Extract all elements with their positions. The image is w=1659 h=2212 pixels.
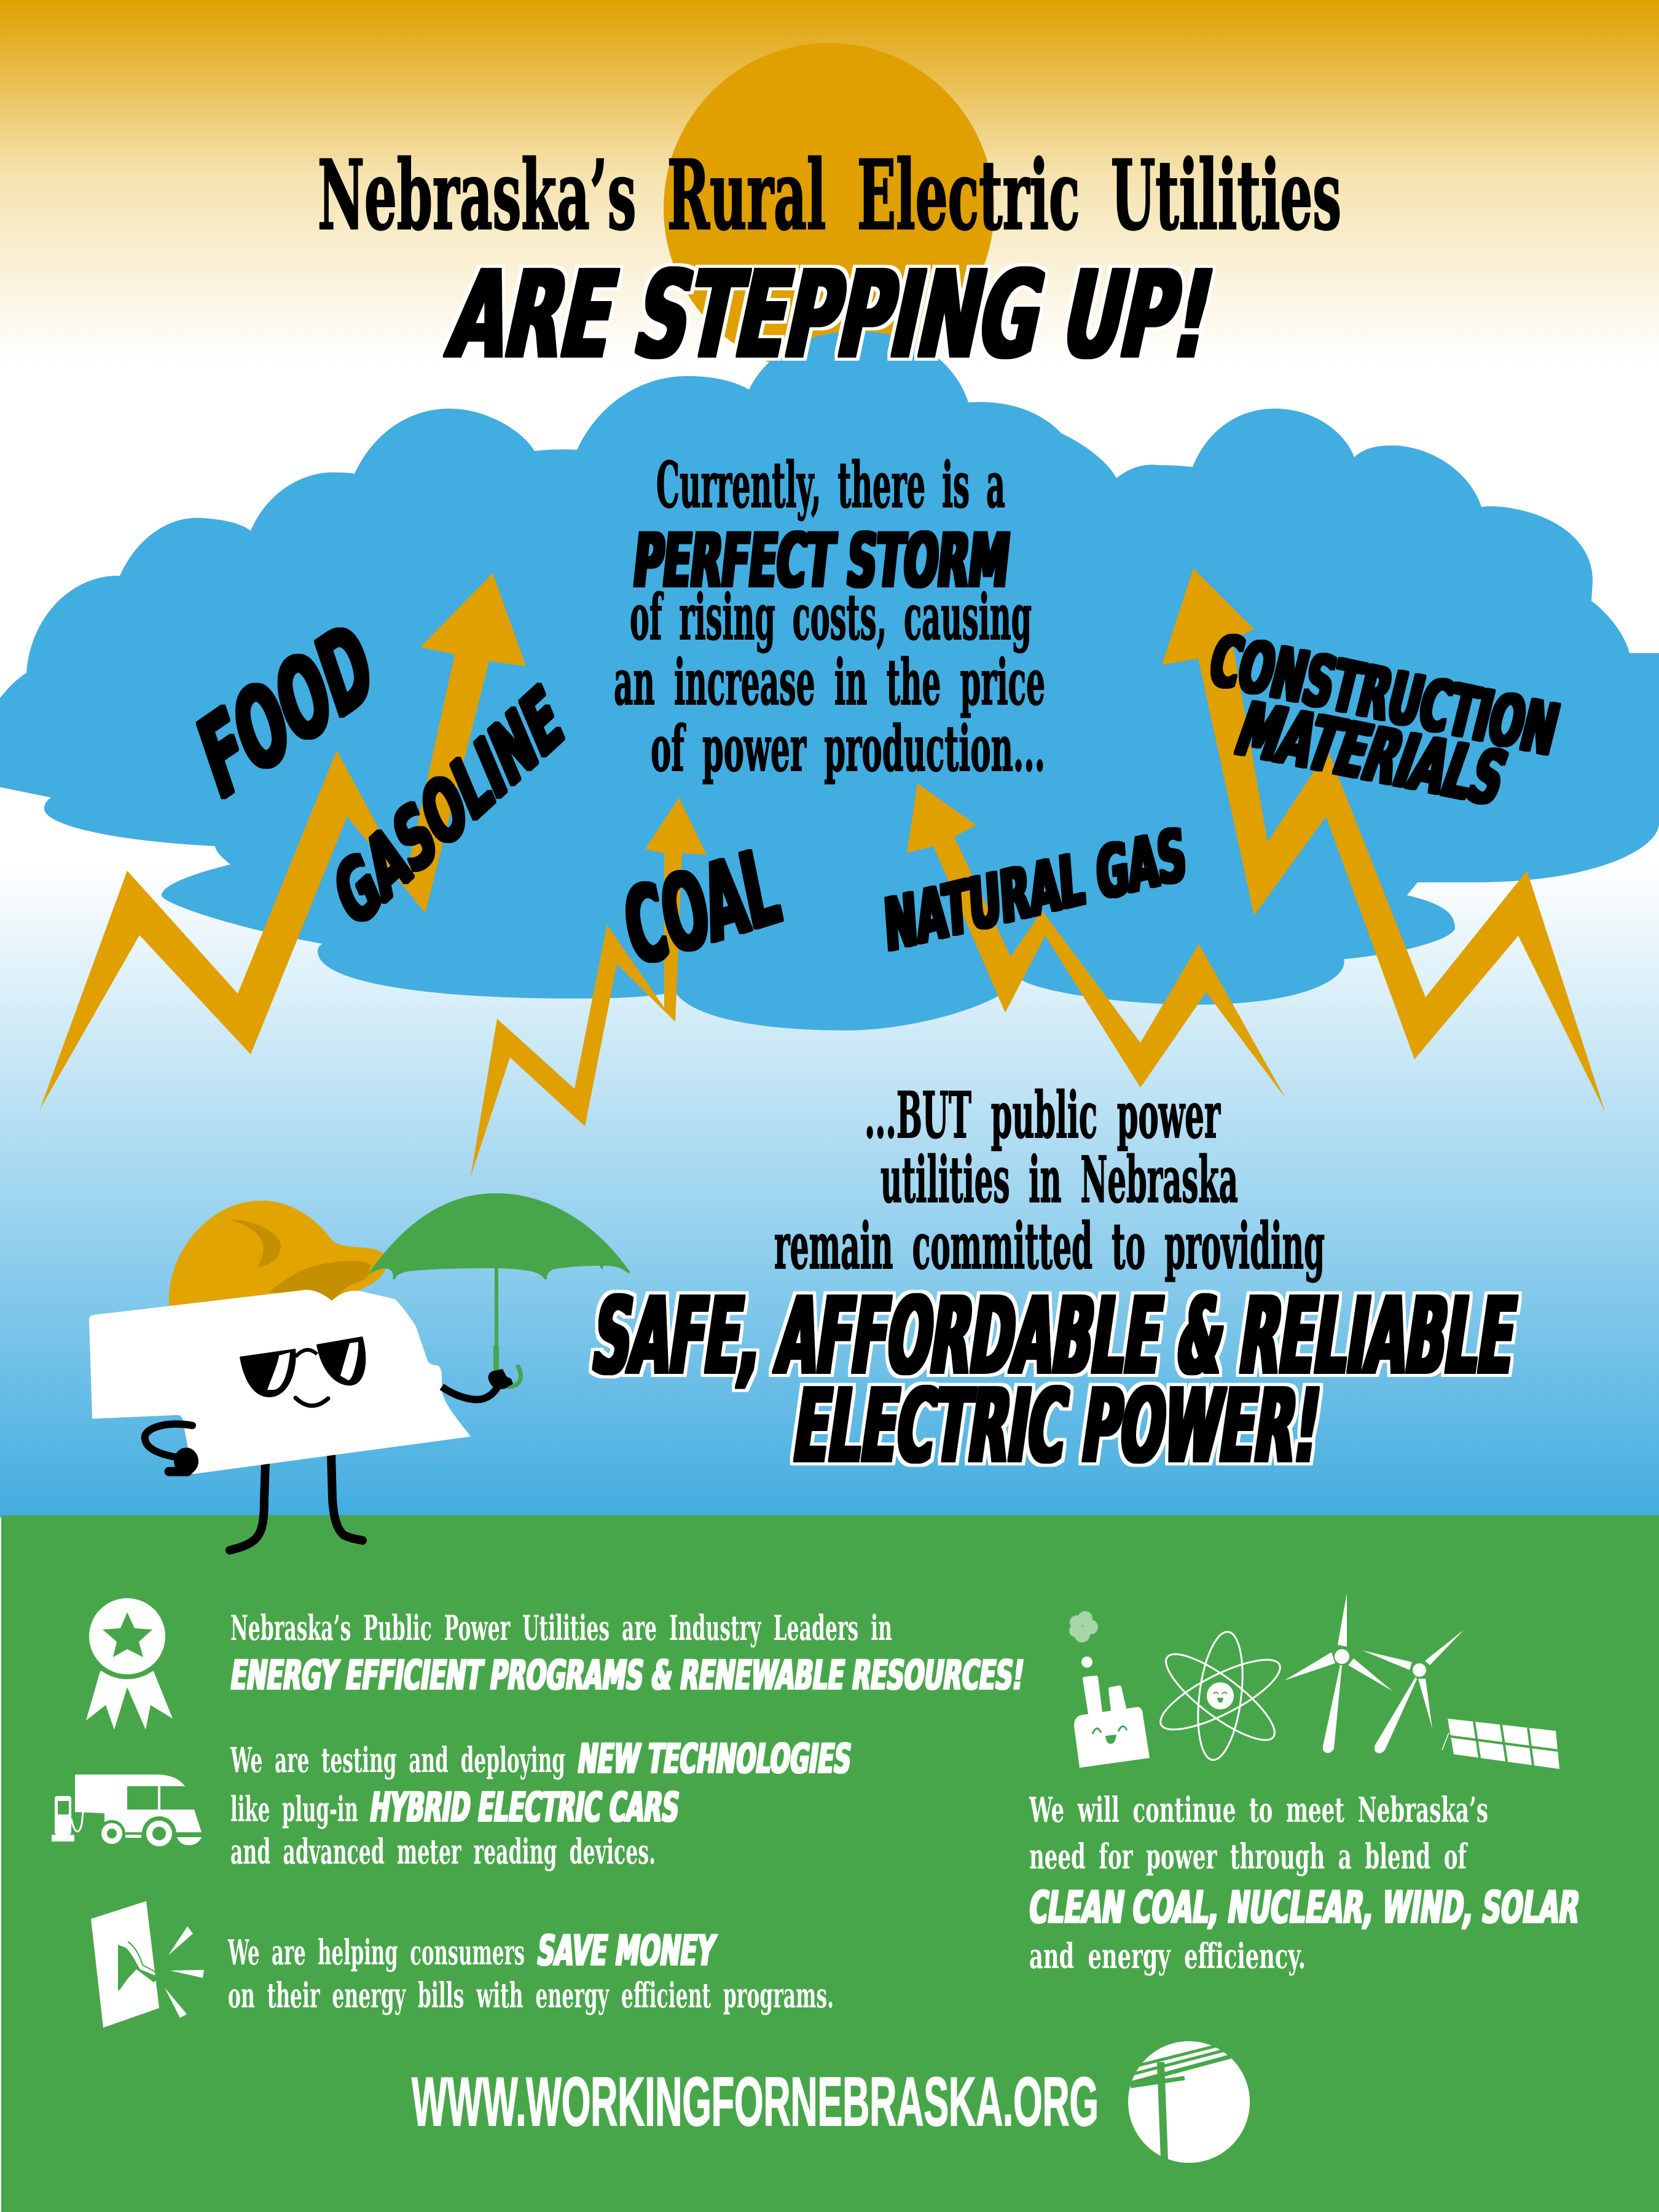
text block: perfect storm: PERFECT STORM [630,518,1014,604]
headline: safe affordable reliable electric power [586,1275,1523,1486]
text: new technologies: NEW TECHNOLOGIES [575,1735,855,1783]
text: of rising costs, causing [630,581,1032,654]
storm cloud [0,331,1659,1030]
text block: perfect storm: Currently, there is a [656,449,1005,522]
mascot legs [230,1453,363,1550]
text: save money [227,1927,834,2016]
text block: perfect storm [614,449,1045,786]
sun [664,43,994,374]
arrow: natural gas [907,783,1285,1098]
sunglasses [240,1336,366,1397]
arrow: food and gasoline [40,573,526,1109]
text: industry leaders: Nebraska’s Public Power Utilities are Industry Leaders in [230,1608,892,1649]
text: save money: on their energy bills with energy efficient programs. [228,1975,834,2016]
text: of power production... [651,712,1045,786]
icon: award ribbon [84,1593,173,1730]
label: food: FOOD [187,596,386,826]
label: gasoline: GASOLINE [324,665,573,949]
text: new technologies: HYBRID ELECTRIC CARS [367,1783,683,1831]
text: new technologies: and advanced meter reading devices. [230,1832,656,1872]
icon: smiling power plant [1069,1611,1150,1768]
logo: power pole in circle [1126,2041,1250,2163]
text block: but public power: utilities in Nebraska [880,1143,1238,1217]
right arm [442,1382,499,1400]
state body [89,1290,471,1474]
label: coal: COAL [616,825,788,991]
text block: but public power [774,1078,1325,1284]
text: save money: SAVE MONEY [535,1927,719,1975]
green ground panel [1,1515,1659,2212]
left arm and hand [145,1424,198,1475]
smile [296,1398,328,1406]
icon: wind turbine one [1284,1593,1392,1753]
text: new technologies: like plug-in [230,1789,358,1830]
text: new technologies: We are testing and deploying [230,1740,565,1781]
text: energy efficient programs: ENERGY EFFICIENT PROGRAMS & RENEWABLE RESOURCES! [228,1651,1027,1699]
row 2: new technologies [52,1735,855,1872]
text: save money: We are helping consumers [227,1932,525,1973]
arrow: coal [471,798,707,1177]
right hand [488,1369,513,1390]
text: an increase in the price [614,646,1045,720]
text: energy blend [1026,1790,1583,1977]
text: new technologies [230,1735,855,1872]
mascot: Nebraska character [89,1193,630,1550]
text: energy blend: and energy efficiency. [1029,1936,1306,1977]
icon: solar panel [1442,1719,1559,1769]
icon: light switch [91,1901,204,2028]
icon: atom [1152,1630,1288,1762]
icon: electric vehicle and charger [52,1775,202,1851]
umbrella [368,1193,630,1387]
icon: wind turbine two [1362,1630,1464,1754]
row 1: industry leaders [84,1593,1027,1730]
energy mix panel [1026,1593,1583,1977]
sky background [0,0,1659,1518]
text block: but public power: ...BUT public power [865,1078,1221,1153]
hard hat [169,1201,387,1306]
label: natural gas: NATURAL GAS [882,813,1188,968]
website url: WWW.WORKINGFORNEBRASKA.ORG [412,2063,1099,2140]
row 3: save money [91,1901,834,2028]
arrow: construction materials [1162,568,1605,1112]
